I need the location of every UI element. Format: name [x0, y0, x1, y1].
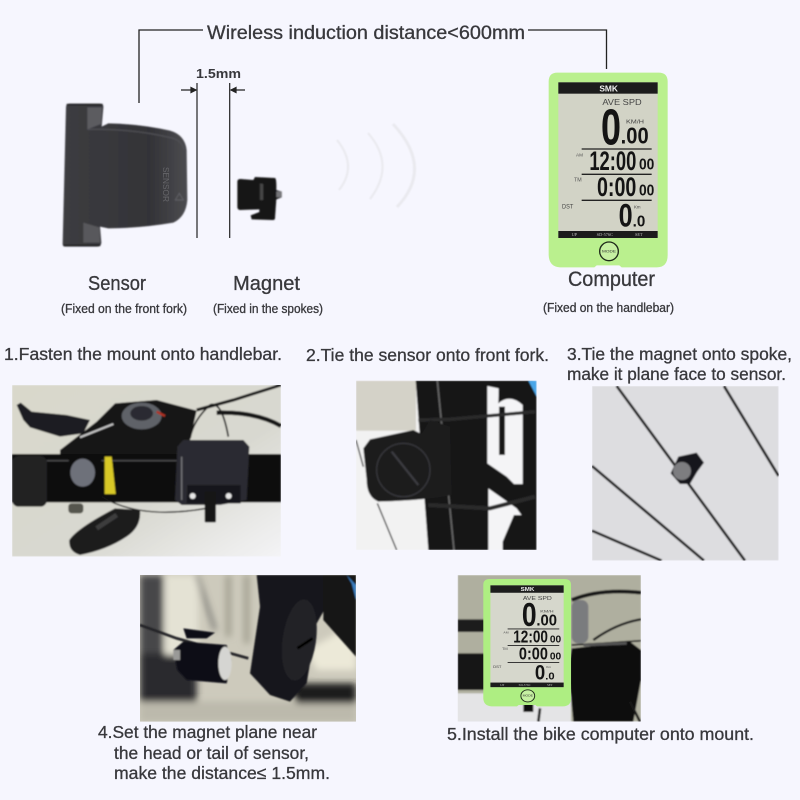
- photo 1: mount on handlebar: [12, 385, 281, 557]
- photo 3: magnet on spoke: [592, 386, 779, 561]
- icon: bike computer: AVE SPD: [602, 98, 642, 107]
- icon: bike computer in photo 5: SMK: [521, 587, 535, 593]
- icon: bike computer: 0:00: [597, 172, 636, 202]
- arrows: 1.5mm gap dimension: [181, 83, 245, 238]
- icon: bike computer: AM: [576, 152, 583, 157]
- icon: bike computer in photo 5: SET: [547, 683, 553, 687]
- label: computer: Computer: [568, 268, 655, 291]
- icon: bike computer in photo 5: 12:00: [513, 627, 548, 646]
- icon: bike computer in photo 5: DST: [493, 664, 502, 669]
- icon: bike computer: Km: [634, 205, 641, 210]
- icon: bike computer: SMK: [599, 83, 619, 93]
- step 4 text line 3: make the distance≤ 1.5mm.: [114, 763, 330, 783]
- icon: bike computer in photo 5: 00: [550, 651, 561, 662]
- icon: bike computer in photo 5: SD-576C: [519, 683, 531, 687]
- step 2 text: 2.Tie the sensor onto front fork.: [306, 345, 549, 365]
- icon: bike computer: .0: [633, 213, 645, 230]
- icon: bike computer in photo 5: [483, 579, 571, 706]
- icon: bike computer in photo 5: TM: [502, 647, 508, 651]
- icon: bike computer: 00: [639, 183, 654, 200]
- icon: bike computer in photo 5: 0: [535, 660, 545, 684]
- icon: bike computer in photo 5: AVE SPD: [523, 596, 552, 602]
- step 1 text: 1.Fasten the mount onto handlebar.: [4, 344, 282, 364]
- icon: bike computer in photo 5: AM: [503, 631, 509, 635]
- caption: sensor position: (Fixed on the front fork): [61, 302, 187, 316]
- step 3 text line 2: make it plane face to sensor.: [567, 364, 786, 384]
- icon: bike computer in photo 5: 0:00: [519, 644, 548, 663]
- icon: bike computer: 12:00: [589, 146, 636, 176]
- bracket: wireless distance left: [139, 30, 203, 103]
- icon: bike computer: .00: [621, 123, 649, 149]
- icon: bike computer: SD-576C: [597, 232, 613, 237]
- icon: bike computer in photo 5: 0: [522, 596, 537, 633]
- step 4 text line 2: the head or tail of sensor,: [114, 743, 309, 763]
- icon: bike computer: MODE: [602, 250, 617, 254]
- icon: bike computer in photo 5: KM/H: [540, 610, 554, 613]
- icon: bike computer in photo 5: .00: [536, 612, 557, 629]
- label: magnet: Magnet: [233, 273, 300, 295]
- icon: bike computer: SET: [635, 232, 643, 237]
- icon: bike computer in photo 5: MODE: [523, 694, 533, 698]
- label: 1.5mm gap: 1.5mm: [196, 66, 241, 81]
- icon: bike computer: KM/H: [626, 120, 644, 126]
- label: sensor: Sensor: [88, 273, 146, 295]
- icon: wireless signal waves: [337, 124, 415, 207]
- icon: sensor: [63, 104, 187, 247]
- icon: bike computer: UP: [572, 232, 578, 237]
- label: sensor marking: SENSOR: [161, 167, 170, 202]
- icon: magnet: [237, 177, 282, 220]
- step 5 text: 5.Install the bike computer onto mount.: [447, 724, 754, 744]
- icon: bike computer: 0: [601, 98, 621, 155]
- icon: bike computer: DST: [562, 205, 574, 211]
- step 3 text: 3.Tie the magnet onto spoke,: [567, 344, 792, 364]
- caption: computer position: (Fixed on the handlebar): [543, 301, 674, 315]
- bracket: wireless distance right: [528, 30, 606, 69]
- caption: magnet position: (Fixed in the spokes): [213, 302, 323, 316]
- step 4 text: 4.Set the magnet plane near: [98, 722, 317, 742]
- icon: bike computer: 00: [639, 157, 654, 174]
- icon: bike computer: [549, 73, 668, 267]
- photo 2: sensor on fork: [356, 381, 537, 550]
- photo 4: magnet near sensor: [140, 575, 356, 722]
- icon: bike computer in photo 5: UP: [500, 683, 505, 687]
- icon: bike computer in photo 5: 00: [550, 634, 561, 645]
- photo 5: computer installed: [458, 575, 641, 722]
- heading: wireless induction distance: Wireless induction distance<600mm: [207, 23, 525, 44]
- icon: bike computer in photo 5: Km: [546, 665, 552, 669]
- icon: bike computer: 0: [619, 196, 633, 233]
- icon: bike computer in photo 5: .0: [545, 671, 555, 682]
- icon: bike computer: TM: [574, 177, 582, 183]
